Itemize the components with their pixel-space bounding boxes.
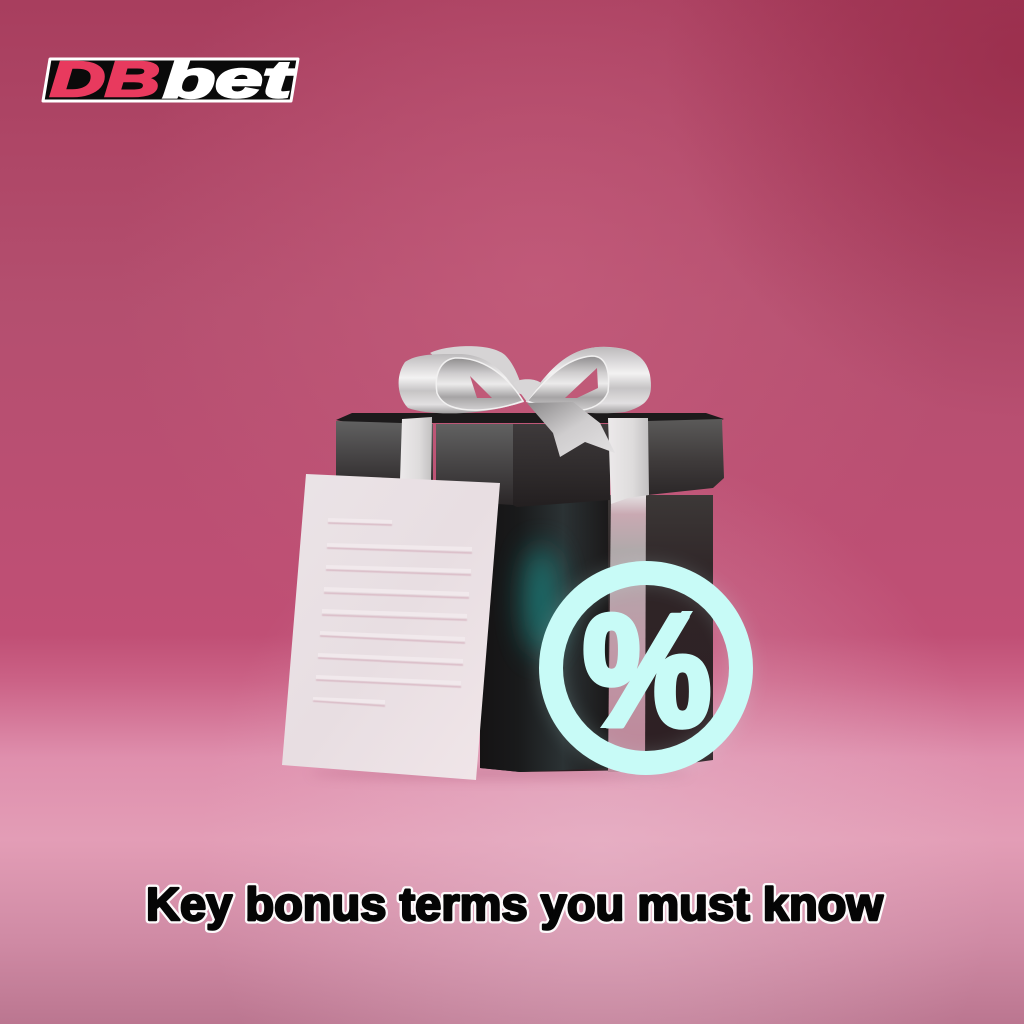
- percent badge: %: [583, 583, 711, 759]
- teal glow on box: [523, 545, 559, 655]
- gift box: [310, 346, 724, 779]
- percent badge: [551, 573, 741, 763]
- lid ribbons: [400, 417, 432, 480]
- title: Key bonus terms you must know: [146, 878, 883, 930]
- lid: [336, 413, 724, 507]
- logo: DBbet: DB: [50, 53, 160, 107]
- logo: DBbet: bet: [163, 51, 295, 109]
- left loop opening: [470, 376, 492, 398]
- right loop: [526, 347, 651, 413]
- title: Key bonus terms you must know: [146, 878, 883, 930]
- left loop: [399, 354, 524, 413]
- ribbon tail: [527, 402, 615, 457]
- text lines on document: [313, 520, 472, 706]
- box ribbon vertical: [608, 495, 646, 772]
- box body: [480, 495, 713, 772]
- bow: [399, 346, 651, 457]
- floor shadow: [310, 767, 690, 779]
- back loops: [430, 346, 524, 395]
- logo: DBbet: [43, 51, 298, 109]
- knot: [513, 379, 541, 402]
- document page: [282, 474, 500, 780]
- right loop opening: [565, 368, 598, 398]
